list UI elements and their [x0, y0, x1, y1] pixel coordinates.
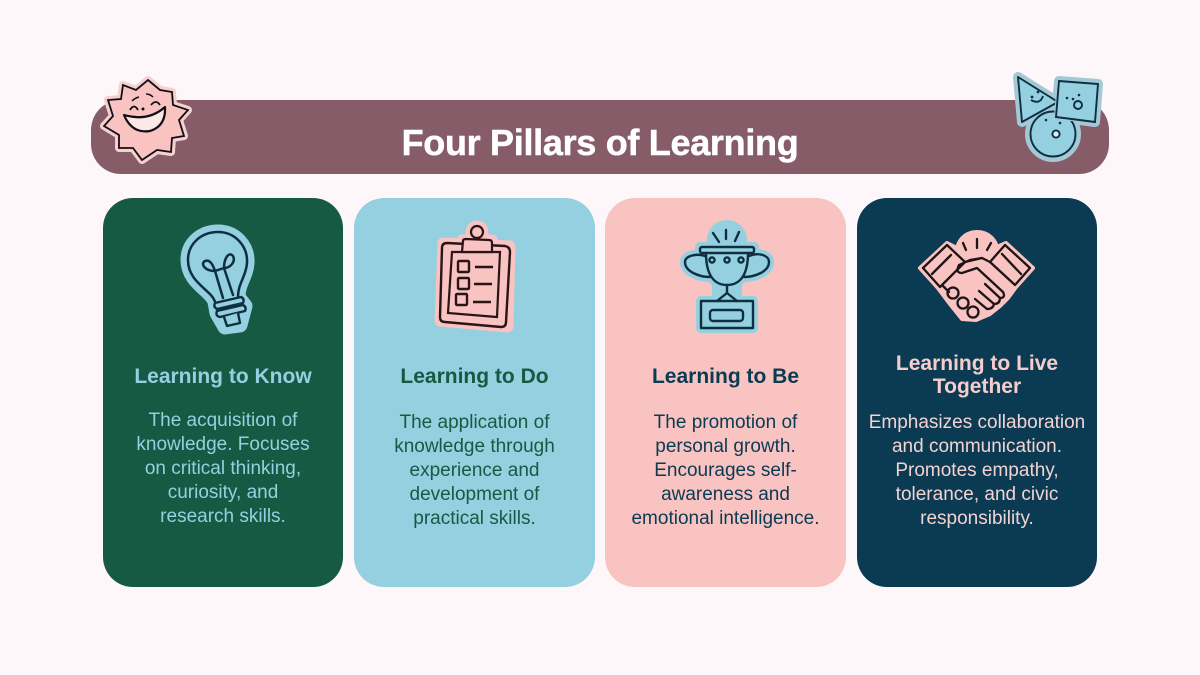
text: learning to do: knowledge through [394, 436, 555, 457]
text: learning to know: knowledge. Focuses [136, 434, 310, 455]
icon: handshake [918, 230, 1036, 322]
text: learning to live together: responsibility. [920, 508, 1034, 529]
heading: learning to live together [896, 352, 1058, 398]
text: learning to live together: and communication. [892, 436, 1062, 457]
panel: learning to live together [857, 198, 1097, 587]
icon: trophy [680, 220, 774, 333]
heading: learning to know: Learning to Know [134, 365, 312, 388]
text: learning to be: Encourages self- [654, 460, 797, 481]
panel: learning to be [605, 198, 846, 587]
text: learning to be: awareness and [661, 484, 790, 505]
text: learning to do: The application of [400, 412, 550, 433]
icon: clipboard checklist [434, 220, 516, 332]
panel: learning to know [103, 198, 343, 587]
text: learning to be: emotional intelligence. [631, 508, 820, 529]
heading: learning to live together: Together [933, 375, 1021, 398]
text: learning to live together [869, 412, 1085, 529]
text: learning to know: The acquisition of [149, 410, 297, 431]
title: Four Pillars of Learning [402, 122, 798, 163]
text: learning to live together: Promotes empathy, [895, 460, 1059, 481]
icon: smiling sun [100, 76, 192, 164]
text: learning to do: development of [410, 484, 539, 505]
icon: shapes with faces [1013, 72, 1103, 162]
panel: learning to do [354, 198, 595, 587]
text: learning to be [631, 412, 820, 529]
text: learning to know: on critical thinking, [145, 458, 301, 479]
text: learning to be: personal growth. [655, 436, 796, 457]
title banner [91, 100, 1109, 174]
heading: learning to be: Learning to Be [652, 365, 799, 388]
text: learning to do: practical skills. [413, 508, 536, 529]
text: learning to live together: tolerance, and civic [896, 484, 1058, 505]
text: learning to know: curiosity, and [168, 482, 278, 503]
icon: light bulb [180, 224, 255, 334]
heading: learning to live together: Learning to Live [896, 352, 1058, 375]
heading: learning to do: Learning to Do [400, 365, 549, 388]
text: learning to do: experience and [410, 460, 539, 481]
text: learning to know [136, 410, 310, 527]
text: learning to do [394, 412, 555, 529]
text: learning to be: The promotion of [654, 412, 797, 433]
text: learning to know: research skills. [160, 506, 286, 527]
text: learning to live together: Emphasizes collaboration [869, 412, 1085, 433]
